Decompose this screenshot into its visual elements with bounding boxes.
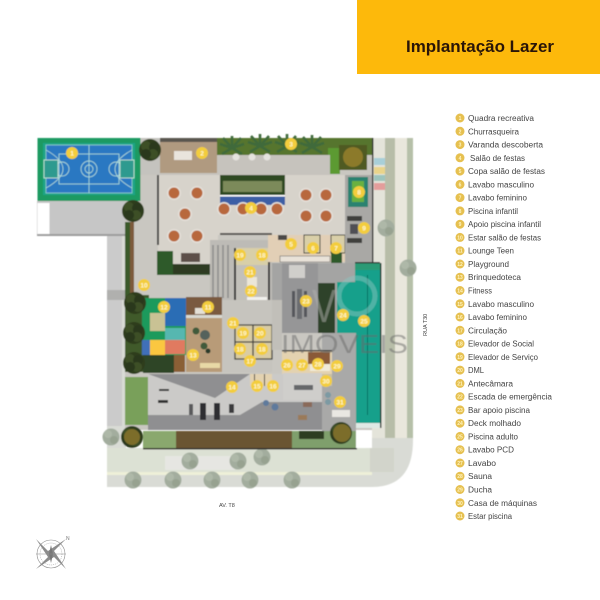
panel: stairs core [210,233,272,333]
number markers: 19 [236,252,244,260]
number markers: 16 [269,384,277,390]
item 16: 16 [457,315,463,321]
street label: Av. T8: AV. T8 [219,503,235,509]
item 17: Circulação [468,326,508,335]
item 15: Lavabo masculino [468,300,535,309]
number markers: 2 [200,150,204,158]
number markers: 5 [289,242,293,248]
number markers: 25 [360,318,368,326]
item 7: 7 [459,196,462,202]
item 30: Casa de máquinas [468,499,537,508]
item 4: Salão de festas [470,154,525,163]
number markers: 30 [322,378,330,386]
item 12: Playground [468,260,509,269]
item 2: Churrasqueira [468,127,520,136]
item 26: Lavabo PCD [468,446,514,455]
number markers: 9 [362,226,366,232]
number markers: 24 [339,312,347,320]
number markers: 17 [246,358,254,366]
watermark [281,278,408,359]
item 19: Elevador de Serviço [468,353,539,362]
item 9: 9 [459,222,462,228]
item 12: 12 [457,262,463,268]
panel: lounge and toy room [186,297,222,372]
number markers: 18 [236,346,244,354]
site plan [37,134,416,488]
number markers: 12 [160,304,168,312]
item 14: 14 [457,288,463,294]
watermark: V [312,280,336,332]
number markers [66,138,370,408]
number markers: 18 [258,252,266,260]
item 21: 21 [457,381,463,387]
item 28 [456,472,493,481]
header banner [357,0,600,74]
panel: copa and lavatories [268,235,345,264]
number markers: 23 [302,298,310,306]
item 19: 19 [457,355,463,361]
panel: sauna row [282,350,332,386]
item 22: Escada de emergência [468,393,553,402]
panel: top garden [160,134,372,175]
panel: adult pool [337,262,382,428]
number markers: 28 [314,362,322,368]
legend [456,114,553,521]
item 2: 2 [459,129,462,135]
number markers: 6 [311,246,315,252]
panel: court [38,138,140,201]
item 25: 25 [457,434,463,440]
panel: playground [142,298,186,355]
item 10: Estar salão de festas [468,233,541,242]
item 25: Piscina adulto [468,432,519,441]
number markers: 4 [249,206,253,212]
item 1: Quadra recreativa [468,114,535,123]
item 31: Estar piscina [468,512,513,521]
item 27 [456,458,497,468]
item 14: Fitness [468,286,492,296]
item 13: Brinquedoteca [468,273,522,282]
panel: pool bar [272,263,355,333]
item 5: 5 [459,169,462,175]
item 7: Lavabo feminino [468,194,528,203]
item 17: 17 [457,328,463,334]
item 5: Copa salão de festas [468,167,545,176]
item 17 [456,326,508,335]
number markers: 1 [70,150,74,158]
watermark: IMOVEIS [281,329,408,359]
tables [167,186,333,243]
number markers: 21 [246,270,254,276]
item 4: 4 [459,156,462,162]
item 21: Antecâmara [468,379,514,388]
item 29: Ducha [468,486,493,494]
item 20 [456,366,485,375]
item 1: 1 [459,116,462,122]
garden trees [121,139,352,448]
item 26: 26 [457,448,463,454]
item 30: 30 [457,501,463,507]
item 18: Elevador de Social [468,340,534,349]
number markers: 8 [357,190,361,196]
panel: circulation and lifts [222,300,282,372]
left lot [37,201,126,236]
item 15: 15 [457,302,463,308]
number markers: 20 [256,330,264,338]
panel: left gardens [125,222,185,425]
item 29: 29 [457,488,463,494]
number markers: 11 [205,304,212,312]
item 10: 10 [457,235,463,241]
number markers: 7 [334,246,338,252]
item 28: 28 [457,474,463,480]
number markers: 19 [239,330,247,338]
number markers: 29 [333,364,341,370]
item 8: Piscina infantil [468,207,518,216]
title: Implantação Lazer [406,38,555,56]
panel: fitness [148,373,322,430]
number markers: 13 [189,352,197,360]
number markers: 18 [258,346,266,354]
item 27: 27 [457,461,463,467]
item 6: 6 [459,182,462,188]
number markers: 27 [298,362,306,370]
panel: small pool [345,175,372,263]
icon: compass: N [66,536,70,542]
item 24: Deck molhado [468,419,522,428]
number markers: 10 [140,282,148,290]
icon: compass [36,536,70,569]
number markers: 31 [336,400,344,406]
panel: bottom planter [143,430,366,450]
item 28: Sauna [468,472,493,481]
surrounding streets [107,138,413,487]
item 27: Lavabo [468,459,497,468]
item 16: Lavabo feminino [468,313,528,322]
number markers: 15 [253,384,261,390]
item 14 [456,286,492,296]
item 13: 13 [457,275,463,281]
item 29 [456,485,493,494]
item 31: 31 [457,514,463,520]
number markers: 14 [228,384,236,392]
street label: Rua T30: RUA T30 [423,314,429,336]
panel: party hall [157,175,345,257]
item 24: 24 [457,421,463,427]
street trees [102,220,416,488]
item 11: Lounge Teen [468,247,514,256]
panel: hall planter [157,251,217,275]
number markers: 21 [229,320,237,328]
item 22: 22 [457,395,463,401]
item 8: 8 [459,209,462,215]
item 9: Apoio piscina infantil [468,220,541,229]
number markers: 3 [289,142,293,148]
item 18: 18 [457,342,463,348]
main site base [125,138,374,430]
number markers: 22 [247,288,255,296]
item 20: 20 [457,368,463,374]
number markers: 26 [283,362,291,370]
item 23: Bar apoio piscina [468,406,531,415]
item 3: 3 [459,143,462,149]
item 11: 11 [457,249,463,255]
panel: barbecue [160,138,217,173]
item 6: Lavabo masculino [468,180,535,189]
item 23: 23 [457,408,463,414]
item 20: DML [468,366,485,375]
panel: right deck [322,333,356,431]
item 3: Varanda descoberta [468,141,544,150]
